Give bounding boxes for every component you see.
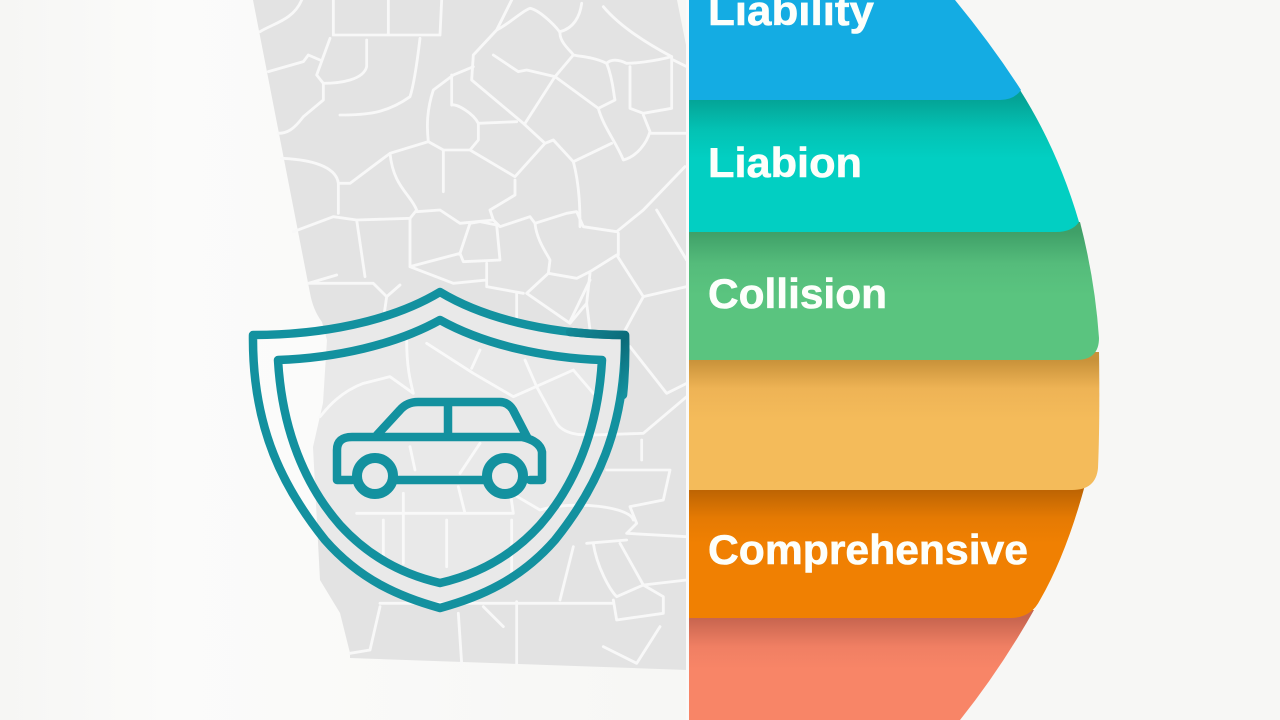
county borders north [260,0,687,333]
shield outer outline [253,292,625,608]
car body [337,437,542,480]
divider strip [686,0,689,720]
label: Comprehensive: Comprehensive [708,526,1028,573]
label: Collision: Collision [708,270,887,317]
icon: shield with car [253,292,625,608]
band: green [689,222,1099,360]
band: salmon [689,610,1034,720]
band: teal [689,90,1079,232]
county borders south [320,280,687,663]
car cabin [377,402,527,437]
band: yellow [689,352,1099,490]
band: orange [689,485,1085,618]
label: Liabion: Liabion [708,139,862,186]
car wheel left [357,458,393,494]
car wheel right [487,458,523,494]
shield inner outline [278,320,602,583]
map silhouette [253,0,687,670]
semicircle coverage bands [689,0,1099,720]
map: Georgia counties [253,0,687,670]
shield shaded corner [570,332,625,395]
band: blue [689,0,1021,100]
